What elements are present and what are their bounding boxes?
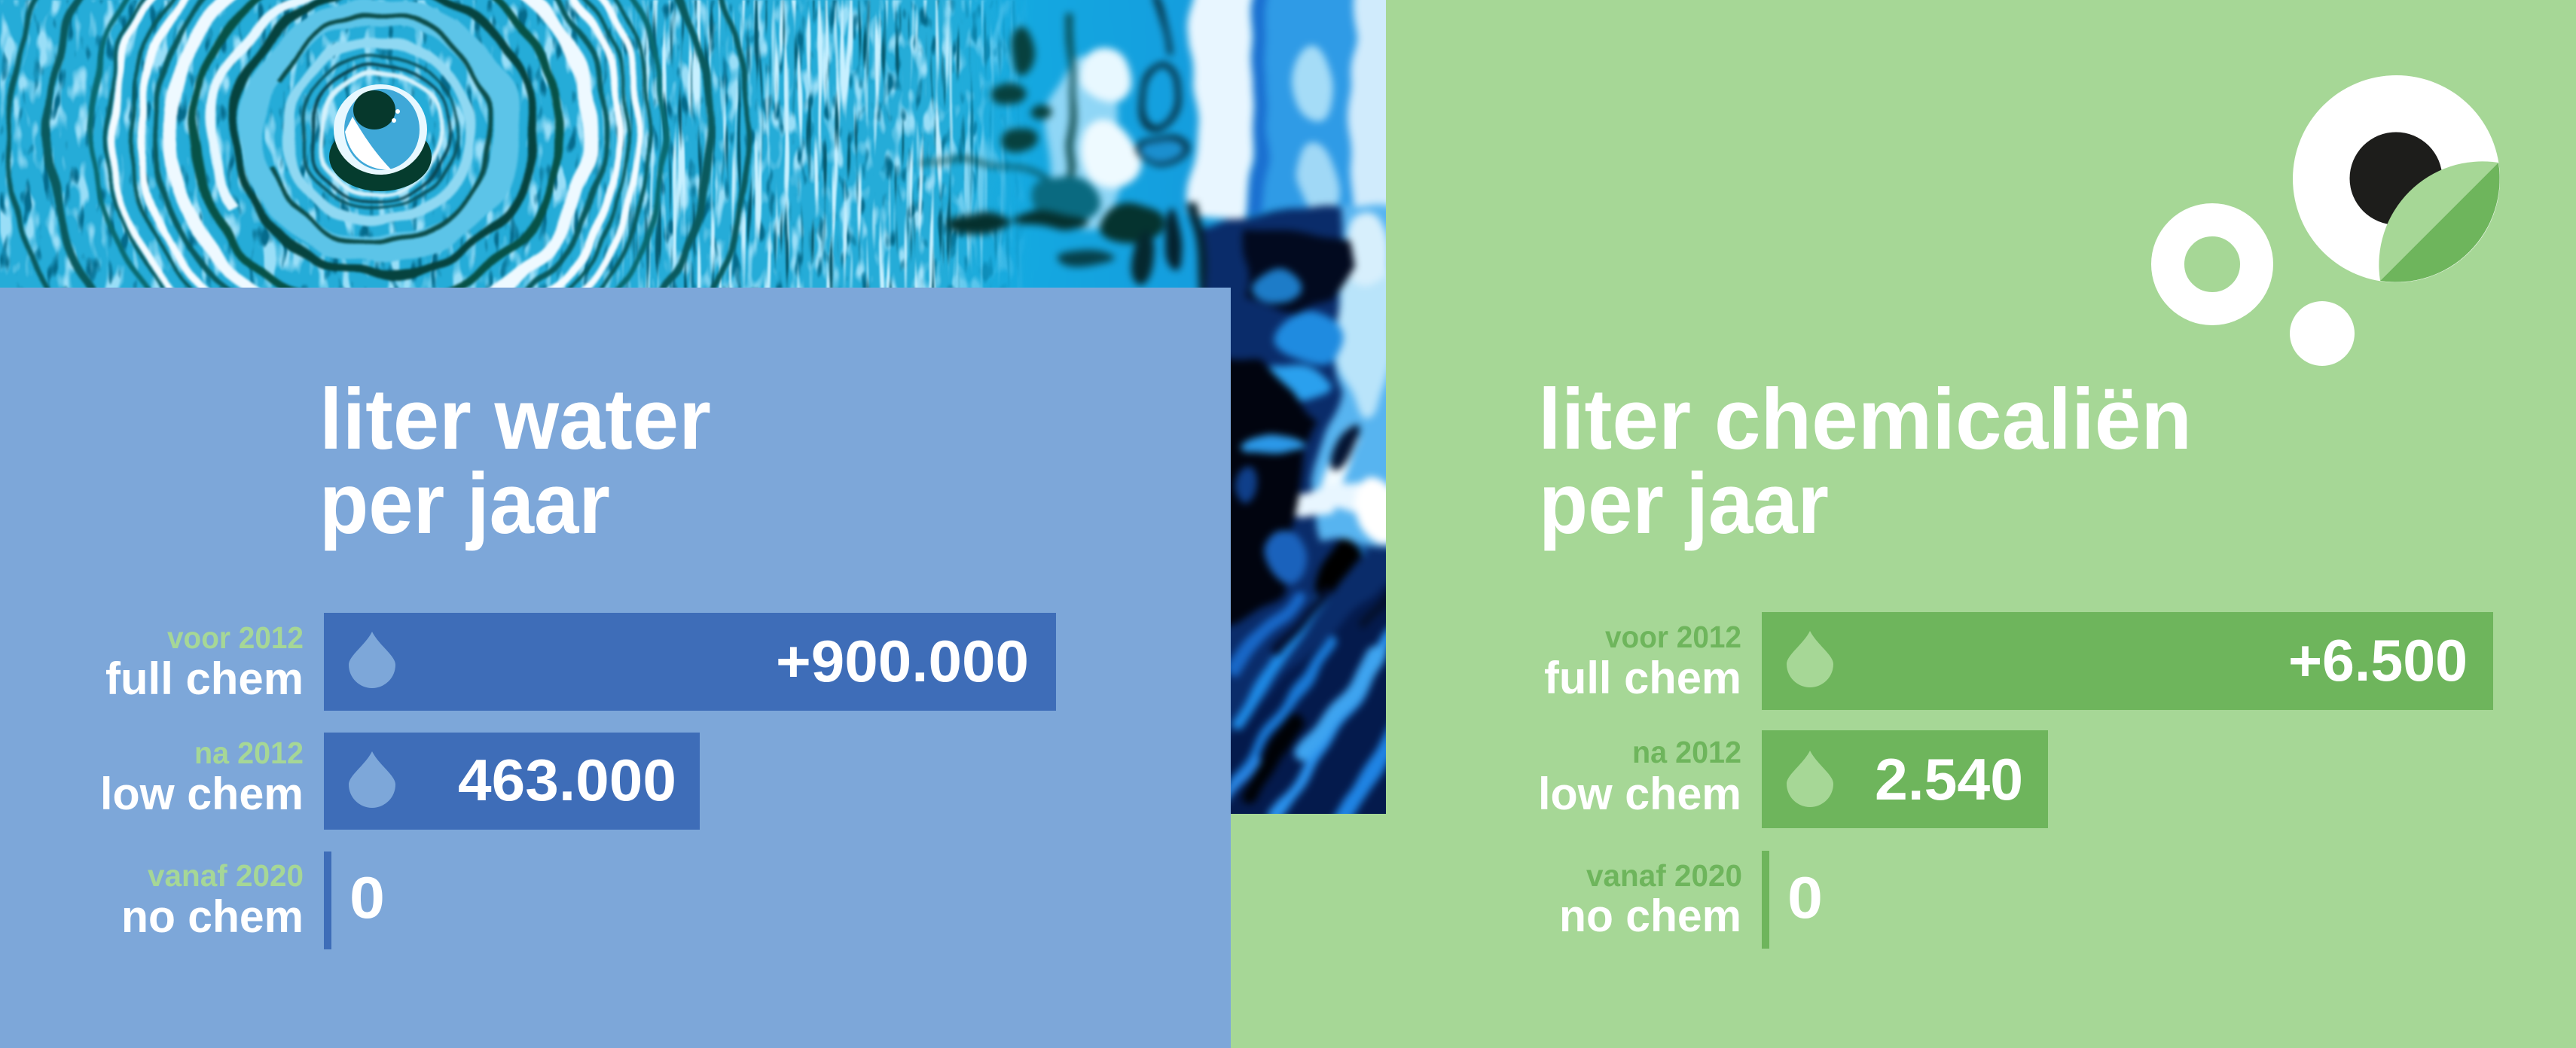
panel: green background: [1231, 0, 2576, 1048]
row: low chem, na 2012: low chem: [1538, 769, 1741, 819]
row: low chem, na 2012: 463.000: [458, 747, 676, 813]
heading: liter water per jaar: [319, 372, 711, 552]
row: no chem, vanaf 2020: no chem: [121, 891, 304, 942]
row: low chem, na 2012: 2.540: [1875, 746, 2023, 812]
row: no chem, vanaf 2020: [1559, 851, 1823, 949]
row: no chem, vanaf 2020: 0: [1787, 864, 1823, 931]
row: low chem, na 2012: [1538, 730, 2048, 828]
row: no chem, vanaf 2020: vanaf 2020: [148, 858, 304, 893]
row: low chem, na 2012: na 2012: [1632, 735, 1741, 769]
panel: liter water: [0, 288, 1231, 1048]
heading: liter water per jaar: per jaar: [319, 456, 610, 552]
lower dark section: [1199, 200, 1386, 742]
row: full chem, voor 2012: +900.000: [776, 628, 1029, 694]
row: full chem, voor 2012: voor 2012: [1605, 620, 1741, 654]
row: low chem, na 2012: na 2012: [194, 736, 304, 770]
icon: eye and leaf circles: [2168, 75, 2500, 366]
row: no chem, vanaf 2020: [121, 852, 385, 949]
panel: liter chemicaliën: [1538, 75, 2500, 949]
row: no chem, vanaf 2020: vanaf 2020: [1586, 858, 1742, 893]
row: full chem, voor 2012: full chem: [1544, 653, 1741, 703]
photo: right side blue water: [916, 0, 1386, 814]
row: full chem, voor 2012: voor 2012: [167, 620, 304, 655]
heading: liter chemicaliën per jaar: liter chemicaliën: [1538, 372, 2192, 468]
row: no chem, vanaf 2020: 0: [349, 864, 385, 931]
row: full chem, voor 2012: full chem: [105, 653, 304, 704]
row: low chem, na 2012: low chem: [100, 769, 304, 819]
row: full chem, voor 2012: +6.500: [2288, 627, 2468, 693]
row: no chem, vanaf 2020: no chem: [1559, 891, 1741, 941]
heading: liter chemicaliën per jaar: per jaar: [1539, 456, 1829, 552]
row: low chem, na 2012: [100, 733, 700, 830]
heading: liter water per jaar: liter water: [319, 372, 711, 468]
photo: water ripples: [0, 0, 1431, 858]
row: full chem, voor 2012: [1544, 612, 2493, 710]
photo: droplet centre: [329, 84, 432, 191]
row: full chem, voor 2012: [105, 613, 1056, 711]
heading: liter chemicaliën per jaar: [1538, 372, 2192, 552]
